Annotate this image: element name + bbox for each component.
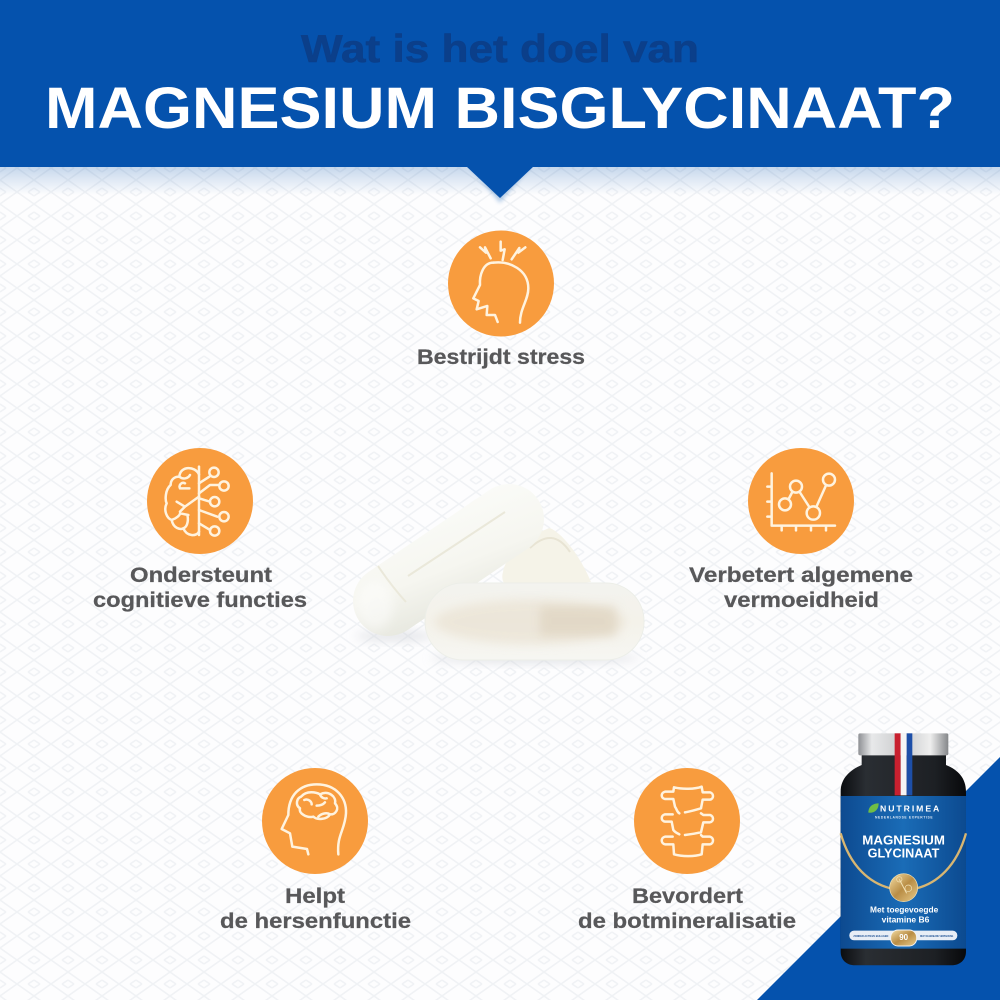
benefit: fatigue — [689, 448, 913, 612]
capsules photo — [355, 512, 644, 663]
icon: digital brain — [165, 467, 229, 536]
ribbon — [895, 733, 912, 795]
pill badge: RECYCLEERBARE VERPAKKING — [920, 934, 954, 938]
brand — [868, 803, 940, 820]
bottle body — [841, 755, 966, 965]
benefit: brain function — [220, 768, 411, 933]
benefit: stress — [417, 230, 585, 369]
pill badge — [849, 930, 957, 946]
benefit: bone mineralisation — [578, 768, 796, 933]
blue corner triangle — [757, 757, 1000, 1000]
label: Helpt — [285, 885, 345, 908]
product name: GLYCINAAT — [868, 845, 939, 860]
label: Ondersteunt — [130, 564, 272, 587]
label: Bestrijdt stress — [417, 346, 585, 369]
benefit: fatigue: vermoeidheid — [724, 589, 879, 612]
product bottle — [841, 733, 966, 965]
subtitle — [870, 905, 939, 924]
bottle label — [841, 796, 966, 949]
label: Bevordert — [632, 885, 743, 908]
left capsule — [357, 512, 509, 629]
product name: MAGNESIUM — [862, 832, 945, 847]
gold arc — [841, 833, 966, 888]
benefit: cognitive: cognitieve functies — [93, 589, 307, 612]
icon: line chart — [767, 473, 835, 530]
pill badge: ZONDER ACTIEVE BIJLAGEN — [853, 934, 888, 938]
bottle cap — [858, 733, 948, 755]
icon: head with lightning — [473, 242, 528, 323]
benefit: bone mineralisation: de botmineralisatie — [578, 910, 796, 933]
heading line 1: Wat is het doel van — [301, 28, 699, 71]
product name — [862, 832, 945, 860]
label: Verbetert algemene — [689, 564, 913, 587]
front capsule — [425, 583, 644, 660]
heading line 2: MAGNESIUM BISGLYCINAAT? — [45, 76, 955, 141]
brand: NEDERLANDSE EXPERTISE — [875, 816, 933, 820]
subtitle: vitamine B6 — [882, 915, 930, 924]
benefit: cognitive — [93, 448, 307, 612]
header banner — [0, 0, 1000, 203]
back capsule — [502, 528, 591, 590]
benefit: brain function: de hersenfunctie — [220, 910, 411, 933]
subtitle: Met toegevoegde — [870, 905, 939, 914]
icon: spine — [662, 787, 713, 856]
icon: head with brain — [282, 784, 346, 854]
brand: NUTRIMEA — [880, 804, 940, 814]
pill badge: 90 — [899, 933, 909, 942]
gold medallion — [890, 874, 918, 902]
